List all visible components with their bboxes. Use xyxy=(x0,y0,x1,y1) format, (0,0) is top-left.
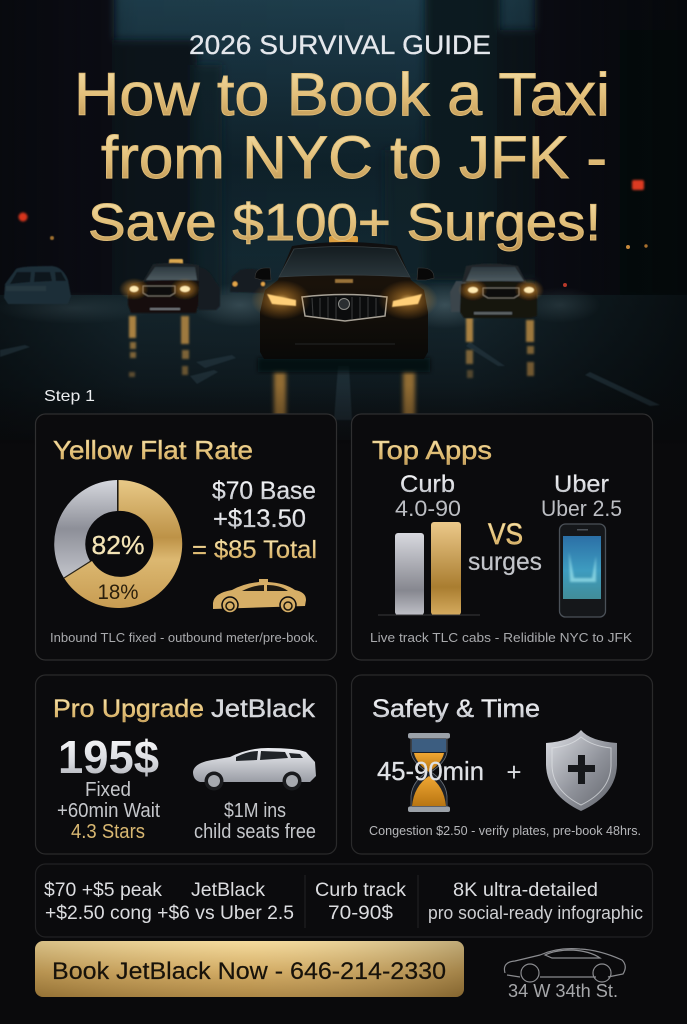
panel: yellow flat rate xyxy=(36,414,336,660)
title: Save $100+ Surges! xyxy=(88,194,601,252)
icon: silver suv xyxy=(193,748,316,790)
peak and congestion fees: JetBlack xyxy=(191,880,266,901)
fare breakdown: $70 Base xyxy=(212,477,316,505)
peak and congestion fees: $70 +$5 peak xyxy=(44,880,162,901)
lower fade xyxy=(0,385,687,445)
infographic note: pro social-ready infographic xyxy=(428,903,643,923)
plus sign: + xyxy=(506,757,522,787)
donut chart: 18% xyxy=(98,581,138,604)
donut chart: 82% xyxy=(92,530,144,560)
icon: right taxi xyxy=(450,264,544,318)
panel heading: pro upgrade jetblack xyxy=(53,695,316,723)
icon: phone xyxy=(560,524,606,617)
infographic note xyxy=(428,880,643,923)
road xyxy=(0,295,687,418)
panel heading: yellow flat rate: Yellow Flat Rate xyxy=(53,435,253,465)
price block: 4.3 Stars xyxy=(71,821,145,843)
icon: outline car xyxy=(504,949,625,982)
icon: distant car xyxy=(230,268,266,293)
panel: pro upgrade jetblack xyxy=(36,675,336,854)
price block: Fixed xyxy=(85,779,131,801)
panel heading: pro upgrade jetblack: Pro Upgrade xyxy=(53,695,204,723)
uber label: Uber 2.5 xyxy=(541,496,622,521)
fare breakdown xyxy=(192,477,317,564)
peak and congestion fees xyxy=(44,880,294,924)
icon: gold taxi xyxy=(213,579,306,613)
panel heading: pro upgrade jetblack: JetBlack xyxy=(211,695,316,723)
panel: safety and time xyxy=(352,675,652,854)
icon: main black taxi xyxy=(251,236,438,359)
fare breakdown: = $85 Total xyxy=(192,536,317,564)
bar chart xyxy=(378,522,480,615)
curb track: 70-90$ xyxy=(328,903,393,924)
icon: left taxi xyxy=(119,259,220,313)
panel heading: top apps: Top Apps xyxy=(372,435,492,465)
wet road reflections xyxy=(129,316,534,378)
caption: Live track TLC cabs - Relidible NYC to JFK xyxy=(370,630,632,645)
uber label xyxy=(541,471,622,521)
curb track: Curb track xyxy=(315,880,407,901)
fare breakdown: +$13.50 xyxy=(213,505,306,533)
insurance note: $1M ins xyxy=(224,800,286,822)
caption: Congestion $2.50 - verify plates, pre-book 48hrs. xyxy=(369,824,641,838)
curb label xyxy=(395,471,461,521)
icon: far parked car xyxy=(4,266,71,304)
peak and congestion fees: +$2.50 cong +$6 vs Uber 2.5 xyxy=(45,903,294,924)
uber label: Uber xyxy=(554,471,609,498)
caption: Inbound TLC fixed - outbound meter/pre-book. xyxy=(50,630,318,645)
vs label: surges xyxy=(468,548,542,576)
insurance note: child seats free xyxy=(194,821,316,843)
button: book jetblack: Book JetBlack Now - 646-214-2330 xyxy=(52,958,446,985)
vs label xyxy=(468,518,542,576)
insurance note xyxy=(194,800,316,843)
icon: hourglass xyxy=(408,733,450,812)
price block: +60min Wait xyxy=(57,800,160,822)
panel heading: safety and time: Safety & Time xyxy=(372,695,540,723)
button: book jetblack xyxy=(35,941,464,997)
price block: 195$ xyxy=(58,731,159,783)
title: How to Book a Taxi xyxy=(74,61,610,128)
hero scene: rainy city street xyxy=(0,0,687,440)
donut chart xyxy=(54,480,182,608)
eyebrow: 2026 survival guide: 2026 SURVIVAL GUIDE xyxy=(189,30,491,60)
curb label: 4.0-90 xyxy=(395,496,461,521)
curb track xyxy=(315,880,407,924)
title xyxy=(74,61,610,252)
panel: summary strip xyxy=(36,864,652,937)
infographic note: 8K ultra-detailed xyxy=(453,880,598,901)
title: from NYC to JFK - xyxy=(101,124,607,191)
vs label: VS xyxy=(488,518,523,551)
icon: traffic lights and far lamps xyxy=(18,180,648,287)
panel: top apps xyxy=(352,414,652,660)
price block xyxy=(57,731,160,843)
address: 34 W 34th St. xyxy=(508,981,618,1001)
curb label: Curb xyxy=(400,471,455,498)
icon: shield xyxy=(546,730,617,811)
step label: Step 1 xyxy=(44,388,95,405)
time label: 45-90min xyxy=(377,756,484,786)
